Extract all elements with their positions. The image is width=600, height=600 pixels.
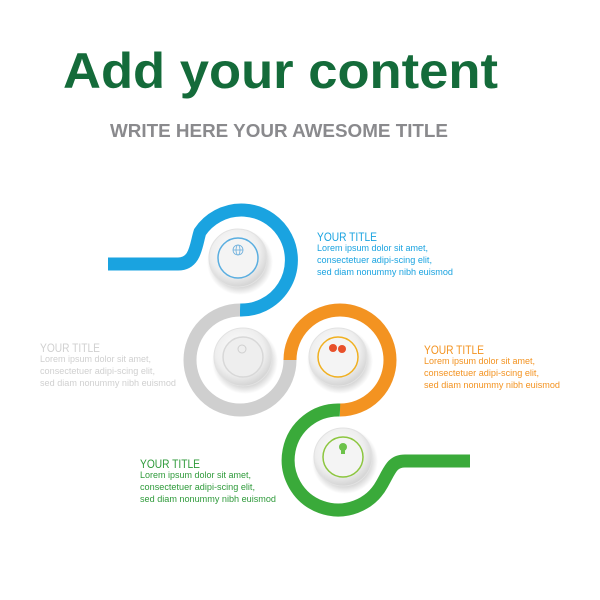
text: green: Lorem ipsum dolor sit amet, bbox=[140, 470, 251, 480]
text: orange: sed diam nonummy nibh euismod bbox=[424, 380, 560, 390]
subtitle: WRITE HERE YOUR AWESOME TITLE bbox=[110, 121, 448, 141]
title: Add your content bbox=[63, 43, 498, 99]
icon: globe bbox=[233, 245, 243, 255]
text: blue: Lorem ipsum dolor sit amet, bbox=[317, 243, 428, 253]
button: blue bbox=[207, 229, 273, 295]
text: gray: Lorem ipsum dolor sit amet, bbox=[40, 354, 151, 364]
button: orange bbox=[307, 328, 373, 394]
icon: clock bbox=[238, 345, 246, 353]
text: blue: consectetuer adipi-scing elit, bbox=[317, 255, 432, 265]
text: green: YOUR TITLE bbox=[140, 459, 200, 471]
text: green: consectetuer adipi-scing elit, bbox=[140, 482, 255, 492]
icon: gears bbox=[329, 344, 346, 353]
text: green bbox=[140, 459, 276, 504]
text: blue bbox=[317, 232, 453, 277]
text: gray: sed diam nonummy nibh euismod bbox=[40, 378, 176, 388]
text: orange: Lorem ipsum dolor sit amet, bbox=[424, 356, 535, 366]
path: orange bbox=[290, 310, 390, 410]
text: blue: YOUR TITLE bbox=[317, 232, 377, 244]
text: orange: YOUR TITLE bbox=[424, 345, 484, 357]
text: orange: consectetuer adipi-scing elit, bbox=[424, 368, 539, 378]
path: green bbox=[288, 410, 470, 510]
path: gray bbox=[190, 310, 290, 410]
button: gray bbox=[212, 328, 278, 394]
path: blue bbox=[108, 210, 291, 310]
text: gray bbox=[40, 343, 176, 388]
text: gray: YOUR TITLE bbox=[40, 343, 100, 355]
icon: bulb bbox=[339, 443, 347, 454]
text: orange bbox=[424, 345, 560, 390]
button: green bbox=[312, 428, 378, 494]
text: green: sed diam nonummy nibh euismod bbox=[140, 494, 276, 504]
text: blue: sed diam nonummy nibh euismod bbox=[317, 267, 453, 277]
text: gray: consectetuer adipi-scing elit, bbox=[40, 366, 155, 376]
